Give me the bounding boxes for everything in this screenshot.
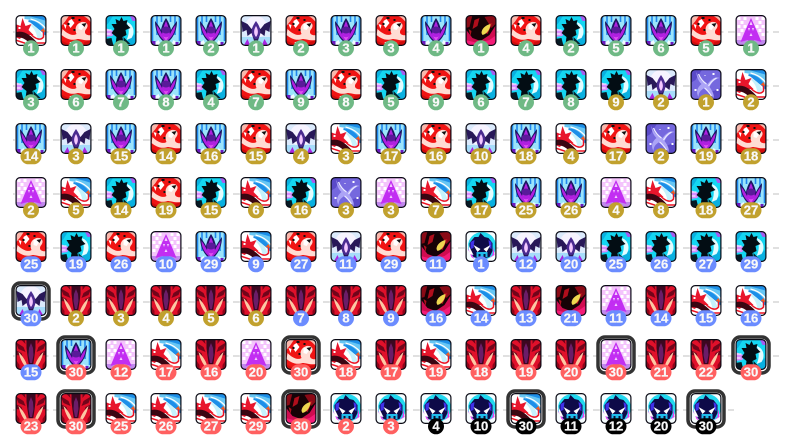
icon: skill 12: 4: [522, 41, 530, 56]
icon: skill 133: 12: [609, 419, 623, 434]
icon: skill 48: [600, 123, 632, 164]
icon: skill 53: 5: [72, 203, 80, 218]
icon: skill 87: [60, 285, 92, 326]
icon: skill 103: [16, 339, 46, 380]
icon: skill 111: [376, 339, 406, 380]
icon: skill 113: 18: [474, 365, 488, 380]
icon: skill 73: [196, 231, 226, 272]
icon: skill 97: 13: [519, 311, 533, 326]
icon: skill 19: 6: [72, 95, 80, 110]
icon: skill 110: 18: [339, 365, 353, 380]
icon: skill 23: [240, 69, 272, 110]
icon: skill 74: [240, 231, 272, 272]
icon: skill 26: [376, 69, 406, 110]
icon: skill 103: 15: [24, 365, 38, 380]
icon: skill 54: 14: [114, 203, 129, 218]
icon: skill 78: [420, 231, 452, 272]
icon: skill 60: [376, 177, 406, 218]
icon: skill 114: [510, 339, 542, 380]
icon: skill 132: 11: [564, 419, 578, 434]
icon: skill 2: 1: [72, 41, 80, 56]
icon: skill 33: [690, 69, 722, 110]
icon: skill 39: [196, 123, 226, 164]
icon: skill 129: 4: [432, 419, 440, 434]
icon: skill 4: 1: [162, 41, 170, 56]
row 6 icons: [13, 283, 766, 326]
icon: skill 127: 2: [342, 419, 350, 434]
icon: skill 92: 7: [297, 311, 305, 326]
icon: skill 106: 17: [159, 365, 173, 380]
icon: skill 47: [556, 123, 586, 164]
row 5 icons: [16, 231, 766, 272]
icon: skill 88: [106, 285, 136, 326]
icon: skill 59: [330, 177, 362, 218]
icon: skill 110: [330, 339, 362, 380]
icon: skill 13: 2: [567, 41, 575, 56]
icon: skill 41: 4: [297, 149, 305, 164]
icon: skill 46: 18: [519, 149, 533, 164]
icon: skill 20: 7: [117, 95, 125, 110]
icon: skill 42: [330, 123, 362, 164]
icon: skill 80: 12: [519, 257, 533, 272]
icon: skill 1: [16, 15, 46, 56]
icon: skill 66: [646, 177, 676, 218]
row 2 icons: [16, 69, 766, 110]
icon: skill 81: [556, 231, 586, 272]
icon: skill 126 highlighted: [283, 391, 319, 434]
icon: skill 53: [60, 177, 92, 218]
icon: skill 55: 19: [159, 203, 173, 218]
icon: skill 89: [150, 285, 182, 326]
icon: skill 64: [556, 177, 586, 218]
icon: skill 9: 3: [387, 41, 395, 56]
icon: skill 121 highlighted: 30: [69, 419, 83, 434]
icon: skill 111: 17: [384, 365, 398, 380]
icon: skill 115: 20: [564, 365, 578, 380]
icon: skill 135 highlighted: 30: [699, 419, 713, 434]
icon: skill 3: [106, 15, 136, 56]
icon: skill 120: 23: [24, 419, 38, 434]
icon: skill 27: [420, 69, 452, 110]
icon: skill 24: [286, 69, 316, 110]
icon: skill 69: [16, 231, 46, 272]
icon: skill 7: [286, 15, 316, 56]
icon: skill 105: [106, 339, 136, 380]
icon: skill 131 highlighted: [508, 391, 544, 434]
icon: skill 41: [286, 123, 316, 164]
icon: skill 22: [196, 69, 226, 110]
icon: skill 56: [196, 177, 226, 218]
icon: skill 31: [600, 69, 632, 110]
icon: skill 18: 3: [27, 95, 35, 110]
icon: skill 49: [646, 123, 676, 164]
icon: skill 129: [420, 393, 452, 434]
row 1 icons: [16, 15, 766, 56]
icon: skill 71: [106, 231, 136, 272]
icon: skill 69: 25: [24, 257, 38, 272]
icon: skill 85: 29: [744, 257, 758, 272]
icon: skill 119 highlighted: [733, 337, 769, 380]
icon: skill 63: 25: [519, 203, 533, 218]
icon: skill 10: 4: [432, 41, 440, 56]
icon: skill 70: 19: [69, 257, 83, 272]
icon: skill 26: 5: [387, 95, 395, 110]
icon: skill 12: [510, 15, 542, 56]
icon: skill 40: [240, 123, 272, 164]
icon: skill 87: 2: [72, 311, 80, 326]
icon: skill 21: [150, 69, 182, 110]
icon: skill 36: 3: [72, 149, 80, 164]
icon: skill 66: 8: [657, 203, 665, 218]
icon: skill 113: [466, 339, 496, 380]
icon: skill 116 highlighted: 30: [609, 365, 623, 380]
icon: skill 75: 27: [294, 257, 308, 272]
icon: skill 99: 11: [609, 311, 623, 326]
icon: skill 128: 3: [387, 419, 395, 434]
icon: skill 15: [646, 15, 676, 56]
icon: skill 30: [556, 69, 586, 110]
icon: skill 134: 20: [654, 419, 668, 434]
icon: skill 96: [466, 285, 496, 326]
icon: skill 15: 6: [657, 41, 665, 56]
icon: skill 130: [466, 393, 496, 434]
icon: skill 118: [690, 339, 722, 380]
icon: skill 76: [330, 231, 362, 272]
icon: skill 75: [286, 231, 316, 272]
icon: skill 94: [376, 285, 406, 326]
icon: skill 48: 17: [609, 149, 623, 164]
icon: skill 82: [600, 231, 632, 272]
icon: skill 93: [330, 285, 362, 326]
icon: skill 122: [106, 393, 136, 434]
icon: skill 108: 20: [249, 365, 263, 380]
icon: skill 84: 27: [699, 257, 713, 272]
icon: skill 9: [376, 15, 406, 56]
icon: skill 102: [736, 285, 766, 326]
icon: skill 123: [150, 393, 182, 434]
icon: skill 20: [106, 69, 136, 110]
icon: skill 72: 10: [159, 257, 173, 272]
icon: skill 117: [646, 339, 676, 380]
icon: skill 58: [286, 177, 316, 218]
icon: skill 131 highlighted: 30: [519, 419, 533, 434]
icon: skill 5: 2: [207, 41, 215, 56]
icon: skill 47: 4: [567, 149, 575, 164]
icon: skill 29: 7: [522, 95, 530, 110]
icon: skill 79: [466, 231, 496, 272]
icon: skill 2: [60, 15, 92, 56]
icon: skill 1: 1: [27, 41, 35, 56]
icon: skill 16: 5: [702, 41, 710, 56]
icon: skill 44: 16: [429, 149, 443, 164]
icon: skill 13: [556, 15, 586, 56]
icon: skill 21: 8: [162, 95, 170, 110]
icon: skill 55: [150, 177, 182, 218]
icon: skill 70: [60, 231, 92, 272]
icon: skill 18: [16, 69, 46, 110]
icon: skill 4: [150, 15, 182, 56]
icon: skill 130: 10: [474, 419, 488, 434]
icon: skill 119 highlighted: 30: [744, 365, 758, 380]
icon: skill 98: 21: [564, 311, 578, 326]
icon: skill 32: 2: [657, 95, 665, 110]
icon: skill 10: [420, 15, 452, 56]
icon: skill 35: [16, 123, 46, 164]
icon: skill 51: 18: [744, 149, 758, 164]
row 7 icons: [16, 337, 769, 380]
icon: skill 11: [466, 15, 496, 56]
icon: skill 27: 9: [432, 95, 440, 110]
icon: skill 54: [106, 177, 136, 218]
icon: skill 101: 15: [699, 311, 713, 326]
icon: skill 56: 15: [204, 203, 218, 218]
icon: skill 23: 7: [252, 95, 260, 110]
icon: skill 6: 1: [252, 41, 260, 56]
icon: skill 128: [376, 393, 406, 434]
icon: skill 107: [196, 339, 226, 380]
icon: skill 22: 4: [207, 95, 215, 110]
icon: skill 104 highlighted: 30: [69, 365, 83, 380]
icon: skill 58: 16: [294, 203, 308, 218]
icon: skill 31: 9: [612, 95, 620, 110]
icon: skill 122: 25: [114, 419, 128, 434]
icon: skill 17: [736, 15, 766, 56]
icon: skill 77: [376, 231, 406, 272]
icon: skill 124: 27: [204, 419, 218, 434]
icon: skill 28: [466, 69, 496, 110]
icon: skill 76: 11: [339, 257, 353, 272]
icon: skill 116 highlighted: [598, 337, 634, 380]
icon: skill 25: [330, 69, 362, 110]
icon: skill 40: 15: [249, 149, 263, 164]
icon: skill 101: [690, 285, 722, 326]
icon: skill 57: [240, 177, 272, 218]
icon: skill 91: [240, 285, 272, 326]
icon: skill 92: [286, 285, 316, 326]
icon: skill 109 highlighted: 30: [294, 365, 308, 380]
icon: skill 67: 18: [699, 203, 713, 218]
icon: skill 68: [736, 177, 766, 218]
icon: skill 8: [330, 15, 362, 56]
icon: skill 50: 19: [699, 149, 713, 164]
row 3 icons: [16, 123, 766, 164]
icon: skill 43: 17: [384, 149, 398, 164]
icon: skill 14: 5: [612, 41, 620, 56]
icon: skill 96: 14: [474, 311, 489, 326]
icon: skill 95: [420, 285, 452, 326]
icon: skill 109 highlighted: [283, 337, 319, 380]
icon: skill 73: 29: [204, 257, 218, 272]
icon: skill 90: 5: [207, 311, 215, 326]
icon: skill 90: [196, 285, 226, 326]
icon: skill 38: [150, 123, 182, 164]
icon: skill 65: [600, 177, 632, 218]
icon: skill 7: 2: [297, 41, 305, 56]
icon: skill 64: 26: [564, 203, 578, 218]
icon: skill 112: 19: [429, 365, 443, 380]
icon: skill 98: [556, 285, 586, 326]
icon: skill 8: 3: [342, 41, 350, 56]
icon: skill 14: [600, 15, 632, 56]
icon: skill 134: [646, 393, 676, 434]
icon: skill 46: [510, 123, 542, 164]
icon: skill 61: [420, 177, 452, 218]
icon: skill 45: [466, 123, 496, 164]
icon: skill 112: [420, 339, 452, 380]
icon: skill 81: 20: [564, 257, 578, 272]
icon: skill 95: 16: [429, 311, 443, 326]
icon: skill 99: [600, 285, 632, 326]
icon: skill 16: [690, 15, 722, 56]
icon: skill 124: [196, 393, 226, 434]
icon: skill 52: [16, 177, 46, 218]
icon: skill 32: [646, 69, 676, 110]
icon: skill 118: 22: [699, 365, 713, 380]
icon: skill 39: 16: [204, 149, 218, 164]
icon: skill 91: 6: [252, 311, 260, 326]
icon: skill 123: 26: [159, 419, 173, 434]
icon: skill 62: [466, 177, 496, 218]
icon: skill 68: 27: [744, 203, 758, 218]
icon: skill 42: 3: [342, 149, 350, 164]
icon: skill 79: 1: [477, 257, 485, 272]
icon: skill 71: 26: [114, 257, 128, 272]
icon: skill 6: [240, 15, 272, 56]
icon: skill 94: 9: [387, 311, 395, 326]
icon: skill 85: [736, 231, 766, 272]
icon: skill 63: [510, 177, 542, 218]
icon: skill 33: 1: [702, 95, 710, 110]
icon: skill 5: [196, 15, 226, 56]
icon: skill 37: [106, 123, 136, 164]
icon: skill 93: 8: [342, 311, 350, 326]
icon: skill 100: [646, 285, 676, 326]
icon: skill 60: 3: [387, 203, 395, 218]
icon: skill 78: 11: [429, 257, 443, 272]
icon: skill 24: 9: [297, 95, 305, 110]
icon: skill 59: 3: [342, 203, 350, 218]
icon: skill 106: [150, 339, 182, 380]
icon: skill 135 highlighted: [688, 391, 724, 434]
icon: skill 89: 4: [162, 311, 170, 326]
icon: skill 82: 25: [609, 257, 623, 272]
icon: skill 34: [736, 69, 766, 110]
icon: skill 3: 1: [117, 41, 125, 56]
icon: skill 83: [646, 231, 676, 272]
row 8 icons: [16, 391, 724, 434]
icon: skill 36: [60, 123, 92, 164]
icon: skill 77: 29: [384, 257, 398, 272]
icon: skill 105: 12: [114, 365, 128, 380]
icon: skill 25: 8: [342, 95, 350, 110]
icon: skill 114: 19: [519, 365, 533, 380]
icon: skill 121 highlighted: [58, 391, 94, 434]
icon: skill 52: 2: [27, 203, 35, 218]
icon: skill 49: 2: [657, 149, 665, 164]
icon: skill 43: [376, 123, 406, 164]
icon: skill 108: [240, 339, 272, 380]
icon: skill 57: 6: [252, 203, 260, 218]
icon: skill 100: 14: [654, 311, 669, 326]
icon: skill 38: 14: [159, 149, 174, 164]
icon: skill 28: 6: [477, 95, 485, 110]
icon: skill 107: 16: [204, 365, 218, 380]
icon: skill 132: [556, 393, 586, 434]
icon: skill 35: 14: [24, 149, 39, 164]
icon: skill 102: 16: [744, 311, 758, 326]
icon: skill 67: [690, 177, 722, 218]
icon: skill 86 highlighted: [13, 283, 49, 326]
icon: skill 11: 1: [477, 41, 485, 56]
icon: skill 34: 2: [747, 95, 755, 110]
icon: skill 127: [330, 393, 362, 434]
icon: skill 80: [510, 231, 542, 272]
icon: skill 83: 26: [654, 257, 668, 272]
icon: skill 61: 7: [432, 203, 440, 218]
icon: skill 62: 17: [474, 203, 488, 218]
icon: skill 117: 21: [654, 365, 668, 380]
icon: skill 86 highlighted: 30: [24, 311, 38, 326]
icon: skill 133: [600, 393, 632, 434]
icon: skill 37: 15: [114, 149, 128, 164]
row 4 icons: [16, 177, 766, 218]
icon: skill 104 highlighted: [58, 337, 94, 380]
icon: skill 19: [60, 69, 92, 110]
icon: skill 30: 8: [567, 95, 575, 110]
icon: skill 126 highlighted: 30: [294, 419, 308, 434]
icon: skill 44: [420, 123, 452, 164]
icon: skill 97: [510, 285, 542, 326]
icon: skill 84: [690, 231, 722, 272]
icon: skill 120: [16, 393, 46, 434]
icon: skill 74: 9: [252, 257, 260, 272]
icon: skill 65: 4: [612, 203, 620, 218]
icon: skill 45: 10: [474, 149, 488, 164]
icon: skill 115: [556, 339, 586, 380]
icon: skill 51: [736, 123, 766, 164]
icon: skill 72: [150, 231, 182, 272]
icon: skill 88: 3: [117, 311, 125, 326]
icon: skill 17: 1: [747, 41, 755, 56]
icon: skill 50: [690, 123, 722, 164]
icon: skill 125: [240, 393, 272, 434]
icon: skill 29: [510, 69, 542, 110]
icon: skill 125: 29: [249, 419, 263, 434]
